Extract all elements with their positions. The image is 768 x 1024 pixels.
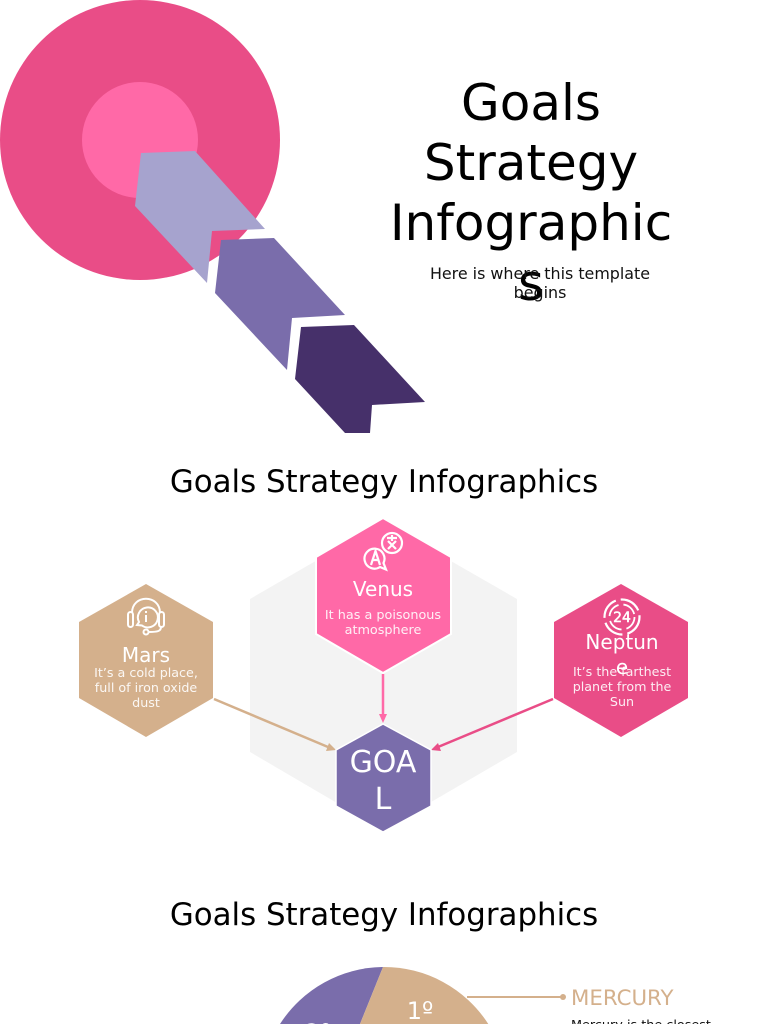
panel: pie chart (280, 967, 488, 1024)
pie slice: purple (280, 967, 383, 1024)
description: Mars: dust (132, 695, 160, 710)
background hexagon (250, 522, 517, 830)
title: s (518, 254, 544, 312)
description: Neptune: planet from the (573, 679, 671, 694)
heading: pie section: Goals Strategy Infographics (170, 897, 598, 933)
leader line: Mercury (467, 994, 566, 1000)
title: Infographic (390, 194, 672, 252)
hexagon: goal (336, 724, 431, 832)
description: Mars: It’s a cold place, (94, 665, 198, 680)
arrow segment: light (135, 151, 265, 283)
label: goal: GOA (350, 745, 417, 780)
icon: translation speech bubbles (364, 533, 402, 570)
icon: target outer circle (0, 0, 280, 280)
subtitle: begins (514, 283, 566, 302)
description: Neptune: Sun (610, 694, 634, 709)
icon: 24 hour clock (604, 600, 640, 634)
description: Venus: It has a poisonous (325, 608, 441, 623)
panel: target and arrow illustration (0, 0, 425, 433)
description: Neptune: It’s the farthest (573, 664, 671, 679)
arrow: Neptune to goal (431, 699, 553, 751)
hexagon: Venus (316, 518, 451, 673)
description: Mars: full of iron oxide (95, 680, 197, 695)
arrow: Venus to goal (379, 674, 387, 723)
label: Neptune: Neptun (585, 630, 659, 654)
arrow: Mars to goal (214, 699, 336, 751)
title: Goals (461, 74, 601, 132)
arrow segment: dark (295, 325, 425, 433)
hexagon: Neptune (554, 584, 688, 737)
icon: headset with info bubble (128, 599, 164, 634)
title: Strategy (424, 134, 638, 192)
arrow segment: mid (215, 238, 345, 370)
label: Venus: Venus (353, 577, 413, 601)
icon: 24 hour clock: 24 (613, 610, 631, 626)
description: Venus: atmosphere (345, 623, 422, 638)
pie slice: tan (360, 967, 488, 1024)
label: Mars: Mars (122, 643, 170, 667)
icon: target inner circle (82, 82, 198, 198)
heading: hexagon section: Goals Strategy Infographics (170, 464, 598, 500)
label: goal: L (375, 782, 392, 817)
panel: hexagon goal diagram (79, 518, 688, 832)
hexagon: Mars (79, 584, 213, 737)
label: Neptune: e (616, 655, 628, 679)
subtitle: Here is where this template (430, 264, 650, 283)
label: Mercury: MERCURY (571, 986, 674, 1011)
